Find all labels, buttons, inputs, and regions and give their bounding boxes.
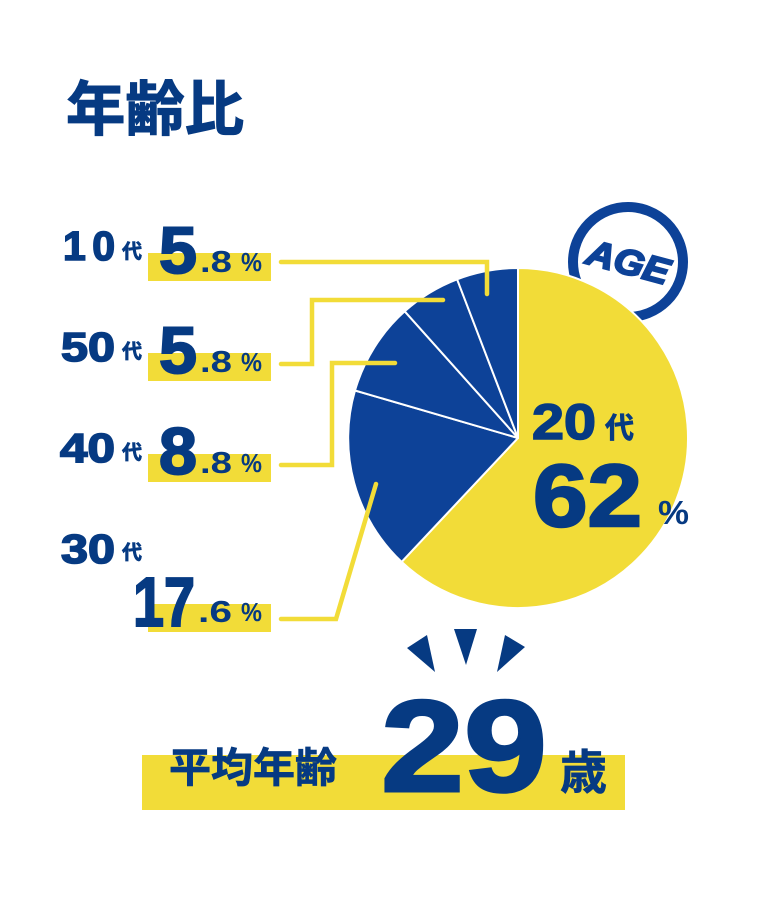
average age banner: 29: [381, 673, 547, 819]
callout: 30代 17.6%: [61, 484, 376, 641]
callout: 50代 5.8%: 代: [122, 341, 142, 363]
callout: 40代 8.8%: 代: [122, 442, 142, 464]
label: 20代 62%: 代: [605, 413, 634, 445]
callout: 30代 17.6%: .6: [198, 594, 232, 629]
icon: AGE badge: [573, 207, 683, 317]
callout: 10代 5.8%: .8: [200, 244, 232, 279]
callout: 50代 5.8%: .8: [200, 344, 232, 379]
callout: 50代 5.8%: [61, 300, 443, 387]
callout: 50代 5.8%: %: [241, 347, 262, 377]
average age banner: [142, 673, 625, 819]
slice: 20代 62%: [402, 268, 688, 608]
callout: 10代 5.8%: 5: [159, 213, 197, 287]
callout: 40代 8.8%: [60, 363, 395, 488]
slice: 40代 8.8%: [355, 311, 518, 438]
slice: 30代 17.6%: [348, 390, 518, 562]
callout: 40代 8.8%: .8: [200, 445, 232, 480]
callout: 10代 5.8%: %: [241, 247, 262, 277]
label: 20代 62%: 62: [533, 446, 642, 545]
callout: 30代 17.6%: 30: [61, 526, 115, 572]
icon: AGE badge: AGE: [581, 231, 675, 293]
callout: 30代 17.6%: %: [241, 597, 262, 627]
callout: 10代 5.8%: 代: [122, 241, 142, 263]
average age banner: 歳: [560, 746, 607, 799]
icon: emphasis ticks: [407, 629, 525, 672]
average age banner: 平均年齢: [169, 745, 337, 791]
callout: 50代 5.8%: 5: [159, 313, 197, 387]
title: 年齢比: [66, 77, 244, 143]
pie chart: [348, 268, 688, 608]
callout: 40代 8.8%: 40: [60, 425, 115, 471]
callout: 10代 5.8%: [63, 213, 487, 294]
callout: 50代 5.8%: 50: [61, 324, 115, 370]
callout: 40代 8.8%: %: [241, 448, 262, 478]
callout: 10代 5.8%: 10: [63, 223, 115, 269]
label: 20代 62%: 20: [532, 394, 596, 450]
slice: 10代 5.8%: [457, 268, 518, 438]
label: 20代 62%: [532, 394, 689, 545]
callout: 40代 8.8%: 8: [159, 414, 197, 488]
callout: 30代 17.6%: 17: [133, 563, 195, 641]
slice: 50代 5.8%: [405, 279, 518, 438]
callout: 30代 17.6%: 代: [122, 542, 142, 564]
label: 20代 62%: %: [658, 494, 689, 531]
